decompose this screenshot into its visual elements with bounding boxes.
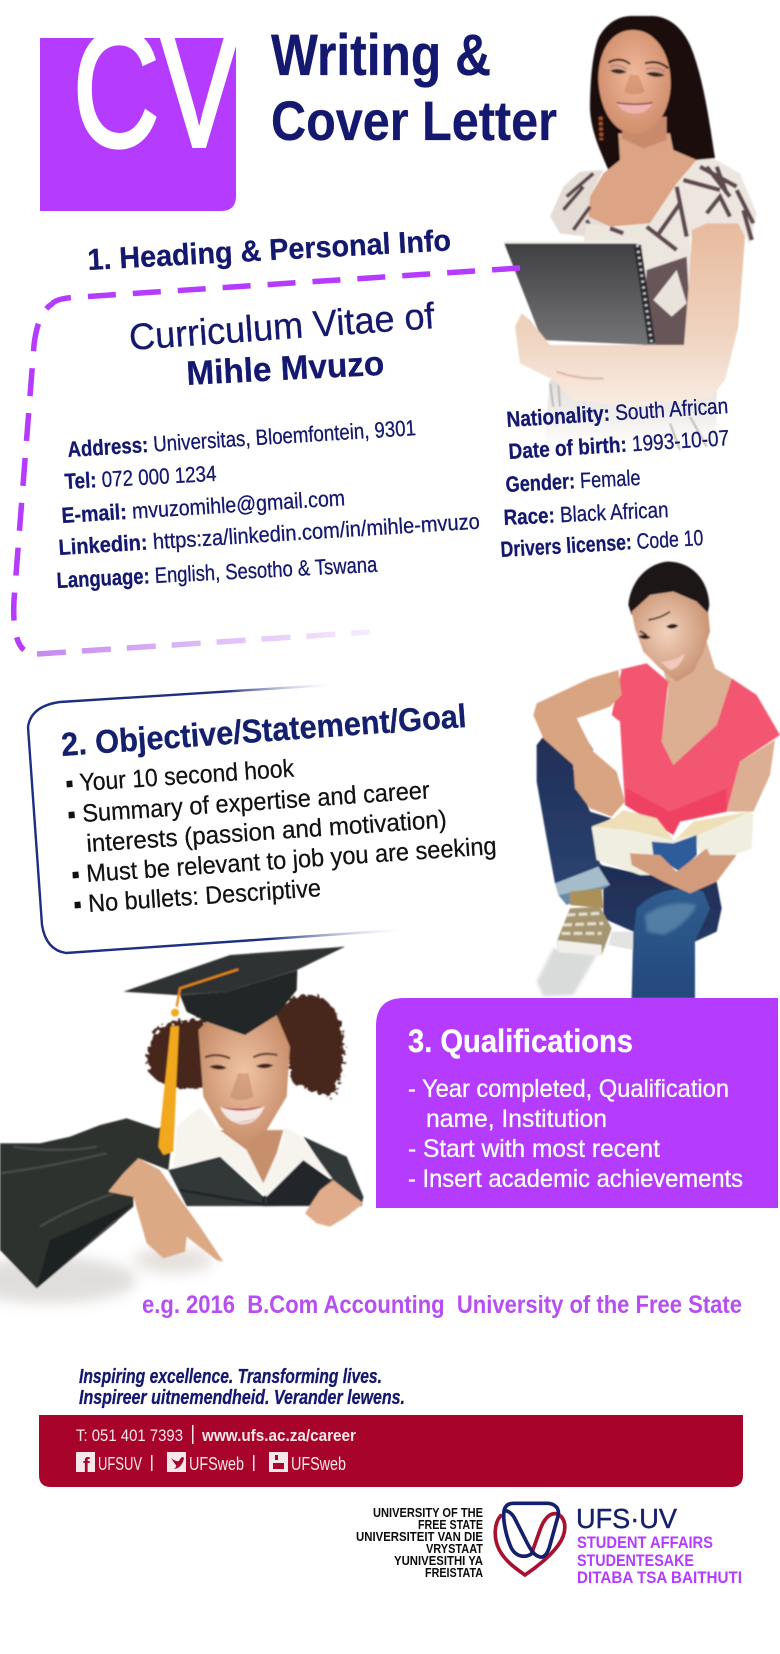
UFS student affairs wordmark: DITABA TSA BAITHUTI [577, 1568, 742, 1587]
social handles [76, 1452, 346, 1477]
personal details: Drivers license: Code 10 [500, 525, 704, 562]
UFS student affairs wordmark: UFS·UV [576, 1503, 677, 1534]
qualifications heading: 3. Qualifications [408, 1023, 633, 1059]
title: Writing & [271, 23, 491, 88]
objective bullets: ▪ Your 10 second hook [65, 754, 295, 798]
photo: student holding a folder [504, 16, 757, 450]
contact details: Linkedin: https:za/linkedin.com/in/mihle-mvuzo [58, 509, 480, 560]
contact details: E-mail: mvuzomihle@gmail.com [61, 485, 346, 528]
photo: student reading [533, 562, 780, 998]
CV badge [40, 38, 236, 211]
phone and website: T: 051 401 7393 [76, 1426, 183, 1445]
objective bullets: interests (passion and motivation) [86, 805, 448, 858]
UFS student affairs wordmark: STUDENTESAKE [577, 1551, 694, 1570]
university name: YUNIVESITHI YA [394, 1553, 484, 1568]
objective heading: 2. Objective/Statement/Goal [60, 697, 467, 763]
UFS student affairs wordmark [576, 1503, 742, 1587]
personal details [500, 393, 730, 562]
personal details: Nationality: South African [506, 393, 729, 432]
university name: VRYSTAAT [426, 1541, 483, 1556]
icon: facebook [76, 1452, 95, 1477]
university name: UNIVERSITEIT VAN DIE [356, 1529, 483, 1544]
contact details [56, 415, 480, 593]
icon: twitter [167, 1452, 186, 1472]
personal details: Date of birth: 1993-10-07 [508, 425, 730, 464]
icon: UFS heart logo [495, 1503, 565, 1575]
personal details: Race: Black African [503, 497, 669, 530]
dashed frame: personal info [14, 268, 520, 654]
personal details: Gender: Female [505, 465, 641, 497]
contact details: Tel: 072 000 1234 [64, 461, 217, 494]
curriculum vitae heading: Curriculum Vitae of [128, 295, 436, 358]
objective bullets: ▪ Summary of expertise and career [67, 776, 431, 829]
objective frame [28, 685, 400, 953]
curriculum vitae heading [128, 295, 436, 393]
qualifications bullets: name, Institution [426, 1105, 607, 1133]
panel: objective [28, 685, 497, 953]
phone and website: www.ufs.ac.za/career [201, 1426, 356, 1445]
tagline: Inspiring excellence. Transforming lives. [79, 1366, 382, 1388]
heading: section 1: 1. Heading & Personal Info [87, 224, 452, 277]
icon: youtube [269, 1452, 288, 1472]
objective bullets: ▪ Must be relevant to job you are seeking [71, 832, 497, 889]
university name: FREISTATA [425, 1565, 484, 1580]
objective bullets: ▪ No bullets: Descriptive [73, 874, 322, 919]
qualifications bullets: - Year completed, Qualification [408, 1075, 729, 1103]
social handles: UFSweb [291, 1454, 346, 1474]
photo: graduate pointing [0, 947, 363, 1303]
qualifications bullets: - Insert academic achievements [408, 1165, 743, 1193]
contact details: Address: Universitas, Bloemfontein, 9301 [67, 415, 417, 462]
social handles: UFSweb [189, 1454, 244, 1474]
contact bar [39, 1415, 743, 1487]
tagline: Inspireer uitnemendheid. Verander lewens. [79, 1387, 405, 1409]
qualifications bullets: - Start with most recent [408, 1135, 660, 1163]
icon: facebook: f [83, 1455, 90, 1477]
objective bullets [65, 754, 497, 919]
panel: qualifications [376, 998, 778, 1208]
tagline [79, 1366, 405, 1409]
qualifications background [376, 998, 778, 1208]
contact details: Language: English, Sesotho & Tswana [56, 552, 378, 593]
CV badge: CV [73, 0, 239, 181]
title: Cover Letter [271, 89, 557, 152]
curriculum vitae heading: Mihle Mvuzo [185, 345, 385, 393]
UFS student affairs wordmark: STUDENT AFFAIRS [577, 1533, 713, 1552]
university name: UNIVERSITY OF THE [373, 1505, 483, 1520]
phone and website [76, 1425, 356, 1445]
university name [356, 1505, 484, 1580]
social handles: UFSUV [98, 1454, 142, 1474]
title [271, 23, 557, 152]
university name: FREE STATE [418, 1517, 483, 1532]
qualifications bullets [408, 1075, 743, 1193]
